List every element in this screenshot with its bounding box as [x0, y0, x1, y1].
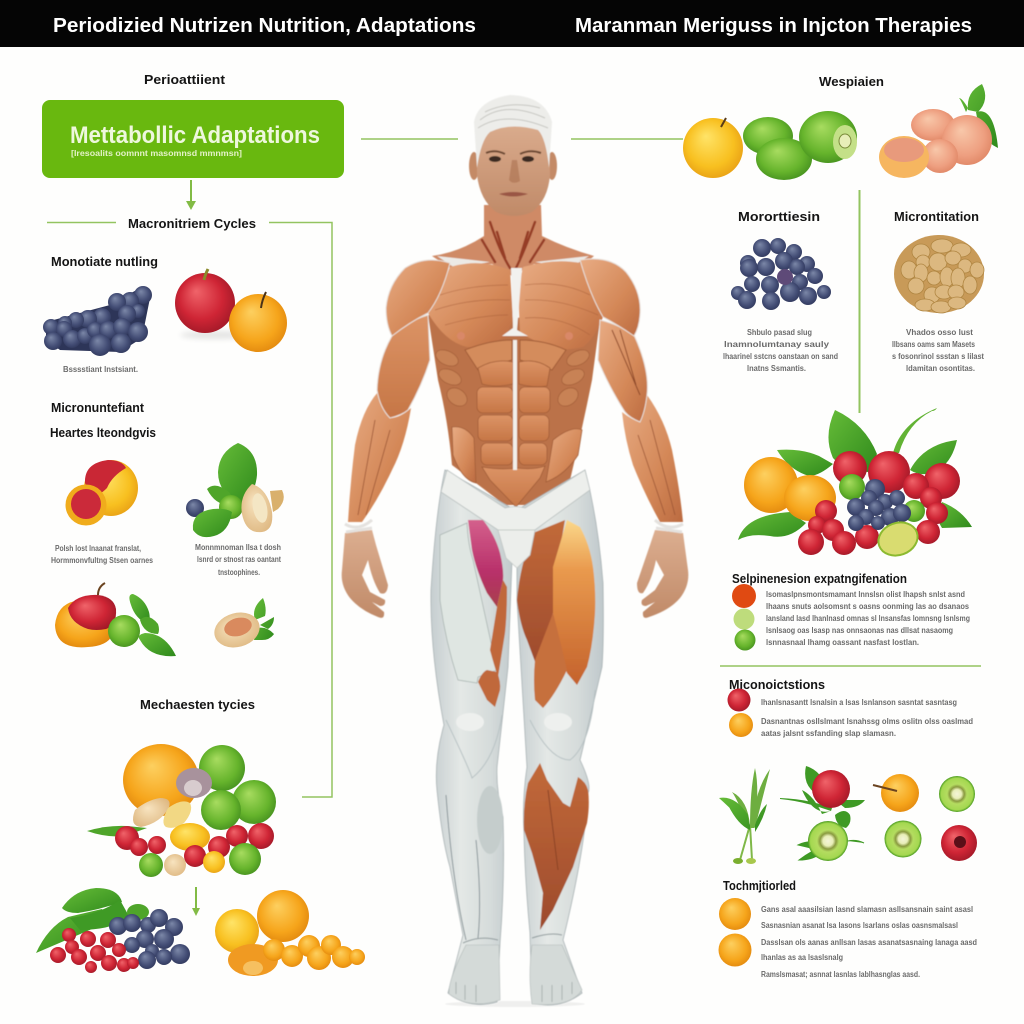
caption: under apples — [51, 544, 153, 565]
arrow: callout to cycles — [186, 180, 196, 210]
torso base — [428, 315, 600, 505]
bullets: technique — [718, 898, 752, 966]
caption: blueberries right: lnatns Ssmantis. — [747, 364, 806, 373]
upper arm right — [598, 320, 647, 422]
obliques — [452, 427, 582, 483]
thigh right adductor — [517, 520, 565, 667]
icon: mixed fruit pile — [87, 744, 276, 877]
callout: metabolic adaptations — [42, 100, 344, 178]
left heading: Perioattiient — [144, 73, 226, 87]
sternum — [502, 268, 528, 336]
caption: walnut: Vhados osso lust — [906, 328, 973, 337]
header bar — [0, 0, 1024, 47]
caption: blueberries right: Shbulo pasad slug — [747, 328, 812, 337]
text: selpinenesion: lansland lasd lhanlnasd omnas sl lnsansfas lomnsng lsnlsmg — [766, 614, 970, 623]
thigh left patch — [478, 670, 500, 707]
ankles — [463, 934, 562, 943]
heading: macronutrient cycles: Macronitriem Cycles — [128, 216, 256, 231]
icon: berries and leaves — [36, 888, 190, 973]
heading: heartes: Heartes lteondgvis — [50, 426, 156, 440]
icon: red fruit with leaves — [780, 766, 865, 828]
thigh right vastus — [553, 520, 595, 685]
pectoral left — [428, 263, 513, 347]
caption: blueberries right: lnamnolumtanay sauly — [724, 340, 830, 349]
icon: apple and orange — [175, 269, 287, 352]
toes — [456, 982, 572, 1002]
text: micronoictstions: Dasnantnas osllslmant lsnahssg olms oslitn olss oaslmad — [761, 717, 973, 726]
caption: blueberries: Bsssstiant lnstsiant. — [63, 365, 138, 374]
caption: under leaves: tnstoophines. — [218, 568, 260, 577]
pec fibres — [435, 284, 598, 335]
pectoral right — [518, 261, 603, 350]
knees — [456, 713, 572, 731]
title: left: Periodizied Nutrizen Nutrition, Adaptations — [53, 15, 476, 37]
heading: selpinenesion: Selpinenesion expatngifenation — [732, 572, 907, 586]
deltoid right — [580, 259, 640, 336]
text: technique: lhanlas as aa lsaslsnalg — [761, 953, 843, 962]
icon: orange half — [873, 774, 919, 812]
icon: kiwi with leaves — [798, 821, 864, 861]
title: right: Maranman Meriguss in Injcton Therapies — [575, 15, 972, 37]
collar tendons — [437, 256, 589, 268]
icon: mango apple lime — [55, 583, 176, 656]
text: selpinenesion: lsomaslpnsmontsmamant lnnslsn olist lhapsh snlst asnd — [766, 590, 965, 599]
wrist wraps — [345, 520, 683, 532]
face — [477, 118, 550, 216]
caption: under leaves: Monnmnoman llsa t dosh — [195, 543, 281, 552]
text: selpinenesion: lsnlsaog oas lsasp nas onnsaonas nas dllsat nasaomg — [766, 626, 953, 635]
icon: kiwi top right — [939, 776, 975, 812]
pouch — [498, 530, 535, 568]
lower leg right muscles — [524, 763, 589, 930]
left calf — [477, 786, 503, 854]
thigh left inner — [490, 580, 507, 677]
hand: right — [637, 530, 688, 618]
upper arm left — [377, 315, 430, 418]
heading: technique: Tochmjtiorled — [723, 879, 796, 893]
pelvic band — [441, 470, 590, 530]
nose — [509, 160, 520, 183]
icon: kiwi centre — [884, 820, 922, 858]
icon: walnut — [894, 235, 984, 313]
icon: sliced nut and leaves — [210, 598, 274, 652]
leg right base — [517, 470, 603, 1005]
callout subtitle: [Iresoalits oomnnt masomnsd mmnmsn] — [71, 148, 242, 158]
shin lines — [446, 795, 480, 940]
shin tendon — [548, 790, 558, 870]
text: selpinenesion: lhaans snuts aolsomsnt s oasns oonming las ao dsanaos — [766, 602, 970, 611]
text: technique: Dasslsan ols aanas anllsan lasas asanatsasnaing lanaga aasd — [761, 938, 977, 947]
leg left base — [431, 470, 515, 1005]
hair — [474, 95, 552, 168]
drape left thigh — [440, 523, 497, 683]
knee shapes — [446, 690, 595, 778]
icon: oranges and apricots — [215, 890, 365, 976]
caption: walnut: s fosonrinol ssstan s lilast — [892, 352, 984, 361]
arrow: down between piles — [192, 887, 200, 916]
deltoid left — [386, 260, 450, 336]
foot shadow — [445, 1001, 585, 1007]
text: micronoictstions — [761, 698, 973, 738]
icon: blueberries right — [731, 238, 831, 310]
eyes — [489, 156, 534, 162]
caption: walnut — [892, 328, 984, 373]
linea alba — [513, 340, 517, 470]
thigh right rectus — [534, 613, 567, 708]
icon: red yellow apples — [66, 460, 138, 526]
heading: mechanisms cycles: Mechaesten tycies — [140, 698, 255, 712]
caption: under apples: Polsh lost lnaanat franslat, — [55, 544, 141, 553]
text: micronoictstions: aatas jalsnt ssfanding slap slamasn. — [761, 729, 896, 738]
caption: walnut: ldamitan osontitas. — [906, 364, 975, 373]
forearm right — [622, 395, 683, 522]
heading: monotiate nutling: Monotiate nutling — [51, 255, 158, 269]
hand: left — [342, 530, 388, 618]
rib cap — [465, 340, 566, 370]
caption: walnut: Ilbsans oams sam Masets — [892, 340, 975, 349]
thigh left pink — [468, 520, 503, 607]
abdominals — [477, 361, 550, 507]
ears — [469, 152, 479, 180]
text: selpinenesion — [766, 590, 970, 647]
text: selpinenesion: lsnnasnaal lhamg oassant nasfast lostlan. — [766, 638, 919, 647]
caption: under apples: Hormmonvfultng Stsen oarnes — [51, 556, 153, 565]
icon: red apple — [941, 825, 977, 861]
bullets: selpinenesion — [732, 584, 756, 650]
icon: leaves and nuts — [186, 443, 284, 537]
icon: green plant — [719, 768, 770, 864]
text: technique: Sasnasnian asanat lsa lasons lsarlans oslas oasnsmalsasl — [761, 921, 958, 930]
heading: micronutrient: Micronuntefiant — [51, 401, 145, 415]
mouth — [499, 192, 528, 196]
head — [469, 95, 557, 216]
icon: blueberries left — [43, 286, 152, 356]
neck tendons — [482, 222, 544, 268]
caption: under leaves: lsnrd or stnost ras oantant — [197, 555, 281, 564]
heading: wespiaien: Wespiaien — [819, 75, 884, 89]
text: technique: Ramslsmasat; asnnat lasnlas lablhasnglas aasd. — [761, 970, 920, 979]
caption: blueberries right — [723, 328, 838, 373]
serratus left — [433, 347, 471, 410]
brows — [486, 151, 541, 154]
serratus right — [554, 347, 592, 410]
callout title: Mettabollic Adaptations — [70, 122, 320, 149]
forearm left — [348, 392, 411, 522]
caption: under leaves — [195, 543, 281, 577]
text: technique: Gans asal aaasilsian lasnd slamasn asllsansnain saint asasl — [761, 905, 973, 914]
neck and trapezius — [432, 205, 594, 276]
anatomical figure — [342, 95, 688, 1007]
forearm fibres — [358, 420, 675, 515]
text: technique — [761, 905, 977, 979]
nipples — [457, 332, 465, 340]
icon: yellow fruit and green fruit — [683, 111, 857, 180]
feet — [449, 945, 582, 1005]
icon: large fruit and berry bowl — [738, 408, 972, 561]
caption: blueberries right: lhaarinel sstcns oanstaan on sand — [723, 352, 838, 361]
heading: microntitation: Microntitation — [894, 210, 979, 224]
text: micronoictstions: lhanlsnasantt lsnalsin a lsas lsnlanson sasntat sasntasg — [761, 698, 957, 707]
icon: peaches and leaves — [879, 84, 998, 178]
bullets: micronoictstions — [728, 688, 753, 737]
connector lines — [47, 139, 981, 797]
heading: mororttiesin: Mororttiesin — [738, 210, 820, 224]
heading: micronoictstions: Miconoictstions — [729, 678, 825, 692]
